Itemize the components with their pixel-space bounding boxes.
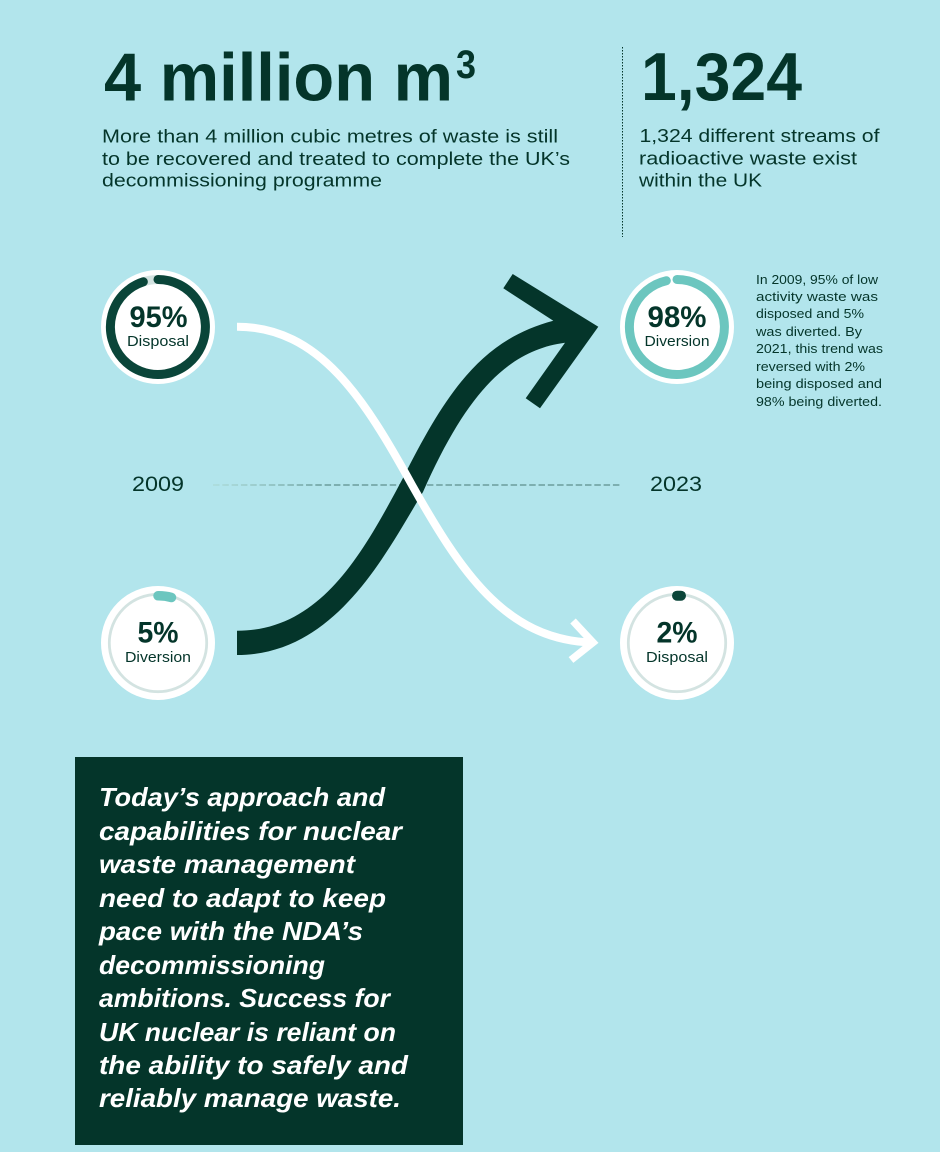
label: Disposal bbox=[127, 333, 189, 350]
label: Diversion bbox=[125, 649, 191, 666]
timeline divider bbox=[213, 484, 620, 486]
side note: trend explanation: 98% being diverted. bbox=[756, 394, 882, 409]
value: 5% bbox=[138, 616, 178, 650]
description: different streams: 1,324 different streams of bbox=[640, 125, 880, 146]
description: waste still to be recovered: to be recovered and treated to complete the UK’s bbox=[102, 148, 570, 169]
description: different streams: within the UK bbox=[638, 170, 763, 190]
stat: 4 million cubic metres bbox=[102, 40, 570, 190]
label: Disposal bbox=[646, 649, 708, 666]
heading: 4 million m3: 3 bbox=[456, 43, 476, 87]
callout text: reliably manage waste. bbox=[99, 1083, 401, 1113]
arrow: diversion rising (dark) bbox=[237, 274, 598, 655]
arrow: disposal declining (white) bbox=[237, 327, 593, 660]
value: 2% bbox=[656, 616, 698, 650]
description: waste still to be recovered: decommissioning programme bbox=[102, 170, 382, 190]
description: waste still to be recovered bbox=[102, 126, 570, 190]
side note: trend explanation: activity waste was bbox=[756, 289, 879, 304]
callout box bbox=[75, 757, 463, 1145]
donut: 95% disposal 2009 bbox=[101, 270, 215, 384]
callout text: pace with the NDA’s bbox=[98, 916, 363, 946]
heading: 4 million m3: 4 million m bbox=[104, 40, 453, 116]
callout text bbox=[98, 782, 409, 1113]
year label 2023: 2023 bbox=[650, 473, 702, 496]
side note: trend explanation: being disposed and bbox=[756, 376, 882, 391]
year label 2009: 2009 bbox=[132, 473, 184, 496]
callout text: ambitions. Success for bbox=[99, 983, 392, 1013]
callout text: Today’s approach and bbox=[99, 782, 386, 812]
heading: 1,324: 1,324 bbox=[641, 39, 802, 115]
donut: 5% diversion 2009 bbox=[101, 586, 215, 700]
donut: 98% diversion 2023 bbox=[620, 270, 734, 384]
description: waste still to be recovered: More than 4 million cubic metres of waste is still bbox=[102, 126, 558, 146]
value: 98% bbox=[648, 301, 706, 334]
callout text: capabilities for nuclear bbox=[99, 816, 404, 846]
callout text: the ability to safely and bbox=[99, 1050, 409, 1080]
description: different streams bbox=[638, 125, 880, 190]
side note: trend explanation bbox=[755, 272, 884, 409]
side note: trend explanation: was diverted. By bbox=[755, 324, 863, 339]
side note: trend explanation: In 2009, 95% of low bbox=[756, 272, 879, 287]
value: 95% bbox=[130, 301, 188, 334]
callout text: need to adapt to keep bbox=[99, 883, 386, 913]
callout text: UK nuclear is reliant on bbox=[99, 1017, 396, 1047]
donut: 2% disposal 2023 bbox=[620, 586, 734, 700]
stat: 1,324 waste streams bbox=[638, 39, 880, 190]
callout text: decommissioning bbox=[99, 950, 325, 980]
side note: trend explanation: 2021, this trend was bbox=[756, 341, 884, 356]
label: Diversion bbox=[644, 333, 710, 350]
description: different streams: radioactive waste exist bbox=[639, 148, 857, 168]
side note: trend explanation: disposed and 5% bbox=[756, 306, 864, 321]
side note: trend explanation: reversed with 2% bbox=[756, 359, 865, 374]
callout text: waste management bbox=[99, 849, 356, 879]
